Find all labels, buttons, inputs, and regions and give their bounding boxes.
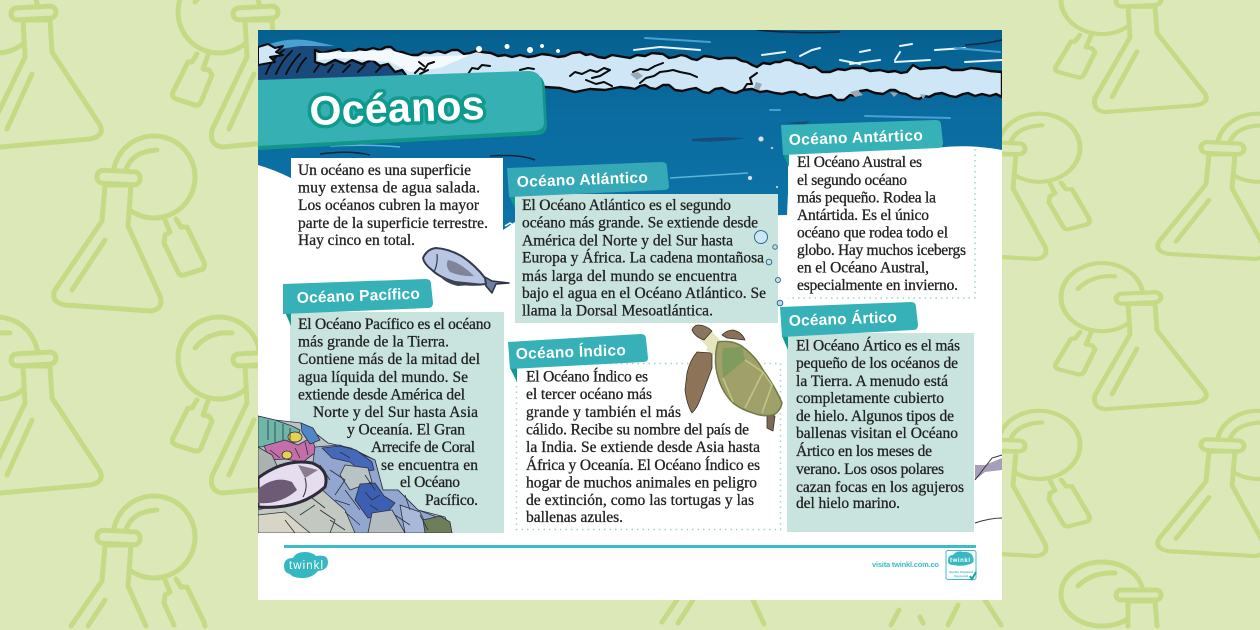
- Antarctic text: especialmente en invierno.: [797, 277, 958, 294]
- heading: Océano Pacífico: Océano Pacífico: [297, 286, 420, 307]
- intro text: [298, 162, 488, 249]
- Antarctic text: océano que rodea todo el: [797, 224, 948, 242]
- Pacific text: el Océano: [400, 474, 460, 491]
- Atlantic text: Europa y África. La cadena montañosa: [522, 250, 764, 267]
- intro text: Los océanos cubren la mayor: [298, 197, 480, 214]
- Atlantic text: más larga del mundo se encuentra: [522, 268, 737, 285]
- Indian text: ballenas azules.: [526, 509, 623, 526]
- twinkl logo: [284, 552, 328, 578]
- Pacific text: El Océano Pacífico es el océano: [298, 316, 491, 333]
- panel: Océano Ártico: [780, 302, 974, 532]
- Antarctic text: El Océano Austral es: [797, 154, 922, 171]
- Antarctic text: globo. Hay muchos icebergs: [797, 242, 966, 259]
- Pacific text: se encuentra en: [381, 457, 478, 474]
- Pacific text: Contiene más de la mitad del: [298, 351, 480, 368]
- footer rule: [284, 545, 976, 548]
- illustration: iceberg fragments: [975, 455, 1002, 523]
- Indian text: [526, 368, 760, 526]
- intro text: parte de la superficie terrestre.: [298, 215, 488, 232]
- title banner: [258, 71, 547, 150]
- Indian text: el tercer océano más: [526, 386, 652, 403]
- heading: Océano Ártico: [780, 302, 918, 350]
- sea foam wave: [315, 47, 1002, 100]
- heading: Océano Ártico: Océano Ártico: [789, 309, 897, 330]
- heading: Océano Índico: Océano Índico: [516, 342, 626, 363]
- Atlantic text: [522, 197, 766, 320]
- Pacific text: Pacífico.: [425, 492, 478, 509]
- illustration: coral reef with fish: [258, 416, 452, 533]
- panel: Océano Antártico: [781, 120, 975, 298]
- Arctic text: de hielo. Algunos tipos de: [796, 408, 954, 425]
- Pacific text: [298, 316, 491, 509]
- Antarctic text: Antártida. Es el único: [797, 207, 929, 224]
- Pacific text: Arrecife de Coral: [371, 439, 475, 456]
- Antarctic text: el segundo océano: [797, 172, 907, 189]
- heading: Océano Atlántico: [507, 162, 669, 208]
- illustration: fish: [423, 248, 509, 293]
- heading: Océano Índico: [508, 334, 648, 382]
- Indian text: cálido. Recibe su nombre del país de: [526, 422, 749, 438]
- title: Océanos: [309, 82, 485, 134]
- Indian text: El Océano Índico es: [526, 368, 648, 386]
- intro text: Hay cinco en total.: [298, 232, 415, 249]
- Arctic text: ballenas visitan el Océano: [796, 425, 958, 442]
- panel: Océano Pacífico: [283, 279, 504, 533]
- Pacific text: y Oceanía. El Gran: [347, 422, 465, 438]
- heading: Océano Antártico: Océano Antártico: [789, 127, 923, 149]
- twinkl logo: twinkl: [289, 560, 323, 572]
- Indian text: África y Oceanía. El Océano Índico es: [526, 457, 760, 474]
- panel: Océano Atlántico: [507, 162, 778, 323]
- ocean scene: [258, 30, 1002, 230]
- bubbles: [748, 136, 783, 306]
- Atlantic text: bajo el agua en el Océano Atlántico. Se: [522, 285, 766, 302]
- Arctic text: Ártico en los meses de: [796, 443, 932, 460]
- Antarctic text: más pequeño. Rodea la: [797, 190, 936, 206]
- Indian text: grande y también el más: [526, 404, 681, 421]
- Indian text: la India. Se extiende desde Asia hasta: [526, 439, 760, 456]
- heading: Océano Atlántico: Océano Atlántico: [517, 169, 648, 191]
- Arctic text: cazan focas en los agujeros: [796, 479, 964, 496]
- Arctic text: completamente cubierto: [796, 390, 944, 407]
- quality badge: Approved: [954, 574, 968, 578]
- Atlantic text: El Océano Atlántico es el segundo: [522, 197, 731, 214]
- intro text: muy extensa de agua salada.: [298, 180, 480, 196]
- Pacific text: extiende desde América del: [298, 386, 465, 404]
- poster sheet: [258, 30, 1002, 600]
- Arctic text: del hielo marino.: [796, 495, 900, 512]
- Pacific text: agua líquida del mundo. Se: [298, 369, 468, 386]
- quality badge: twinkl: [950, 558, 970, 564]
- Arctic text: El Océano Ártico es el más: [796, 338, 960, 355]
- Arctic text: pequeño de los océanos de: [796, 355, 958, 372]
- Atlantic text: América del Norte y del Sur hasta: [522, 233, 733, 250]
- Pacific text: más grande de la Tierra.: [298, 334, 449, 350]
- Antarctic text: [797, 154, 966, 294]
- Antarctic text: en el Océano Austral,: [797, 260, 929, 276]
- Arctic text: [796, 338, 964, 512]
- Indian text: hogar de muchos animales en peligro: [526, 474, 757, 492]
- website link: visita twinkl.com.co: [872, 560, 939, 569]
- Indian text: de extinción, como las tortugas y las: [526, 492, 754, 509]
- heading: Océano Pacífico: [283, 279, 433, 326]
- Arctic text: verano. Los osos polares: [796, 461, 944, 478]
- illustration: sea turtle: [685, 325, 782, 431]
- quality badge: [946, 550, 976, 580]
- Atlantic text: llama la Dorsal Mesoatlántica.: [522, 303, 713, 320]
- Atlantic text: océano más grande. Se extiende desde: [522, 215, 758, 232]
- heading: Océano Antártico: [781, 120, 943, 167]
- fish in reef: [258, 462, 326, 507]
- panel: introduction: [291, 158, 503, 249]
- Arctic text: la Tierra. A menudo está: [796, 373, 948, 390]
- intro text: Un océano es una superficie: [298, 162, 471, 179]
- quality badge: Quality Standard: [949, 570, 973, 574]
- panel: Océano Índico: [508, 334, 780, 530]
- Pacific text: Norte y del Sur hasta Asia: [313, 404, 478, 421]
